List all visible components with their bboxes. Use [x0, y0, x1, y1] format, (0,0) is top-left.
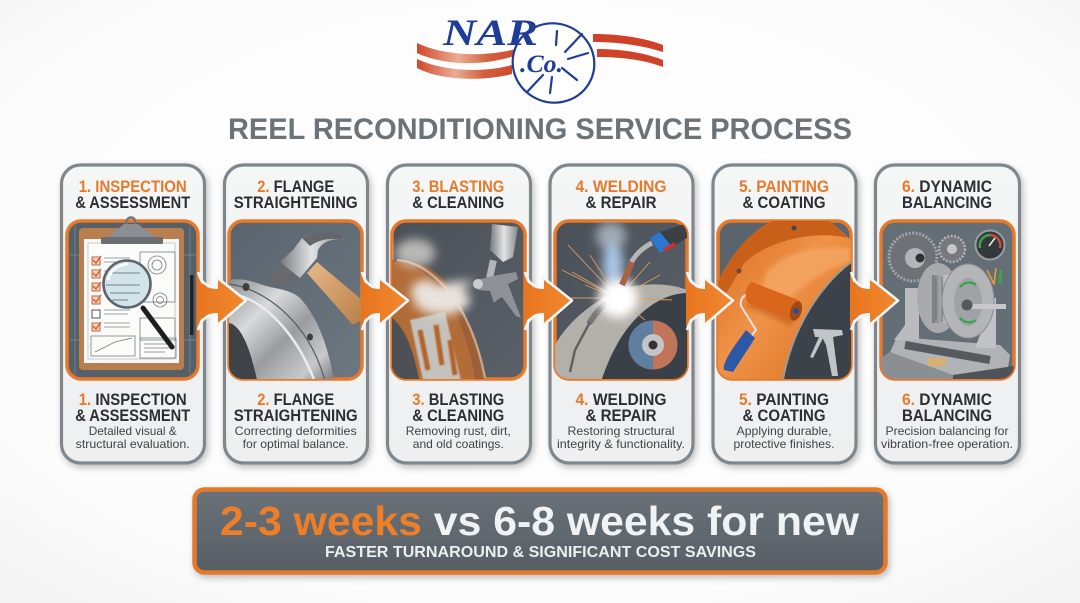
technical drawings: [91, 252, 176, 358]
step 3 description: Removing rust, dirt,: [406, 424, 511, 438]
clipboard clip: [101, 218, 163, 244]
panel: step 1 inspection card: structural evaluation.: [76, 437, 190, 451]
reel: [917, 263, 1006, 338]
title: REEL RECONDITIONING SERVICE PROCESS: [228, 113, 852, 146]
step 2 lower title: 2. FLANGE: [257, 391, 334, 409]
checklist: [92, 256, 130, 331]
step 1 description: Detailed visual &: [89, 424, 177, 438]
vibration gauge: [976, 230, 1004, 260]
pen: [190, 275, 194, 335]
arrow: step 2 to 3: [361, 272, 408, 330]
step 1 heading: 1. INSPECTION: [79, 178, 187, 196]
panel: step 3 blasting card: and old coatings.: [413, 437, 504, 451]
panel: step 2 flange card: for optimal balance.: [243, 437, 349, 451]
step 3 lower title: 3. BLASTING: [412, 391, 504, 409]
step 2 description: Correcting deformities: [235, 424, 357, 438]
step 1 subheading: & ASSESSMENT: [75, 194, 190, 212]
magnifying glass: [104, 260, 172, 347]
welding torch: [622, 222, 690, 285]
panel: step 5 painting card: & COATING: [742, 407, 826, 425]
step 4 illustration: welding torch and grinding disc: [555, 221, 690, 385]
panel: step 6 balancing card: BALANCING: [902, 407, 992, 425]
callout subline: FASTER TURNAROUND & SIGNIFICANT COST SAVINGS: [325, 544, 756, 561]
gears: [889, 233, 965, 281]
panel: step 4 welding card: integrity & functionality.: [557, 437, 685, 451]
panel: step 3 blasting card: [388, 165, 530, 463]
arrow: step 3 to 4: [524, 272, 572, 330]
step 4 description: Restoring structural: [568, 424, 674, 438]
panel: step 6 balancing card: [876, 165, 1020, 463]
arrow: step 5 to 6: [850, 272, 898, 330]
step 3 heading: 3. BLASTING: [412, 178, 504, 196]
spray gun: [810, 329, 843, 376]
panel: step 1 inspection card: & ASSESSMENT: [75, 407, 190, 425]
step 1 illustration: clipboard and magnifier: [67, 218, 198, 379]
step 2 heading: 2. FLANGE: [257, 178, 334, 196]
step 3 illustration: rusty flange and spray gun: [392, 221, 525, 385]
callout banner: [194, 490, 886, 572]
panel: step 6 balancing card: BALANCING: [902, 194, 992, 212]
step 6 illustration: balancing machine: [881, 221, 1014, 385]
panel: step 5 painting card: & COATING: [742, 194, 826, 212]
panel: step 2 flange card: [224, 165, 368, 463]
step 5 lower title: 5. PAINTING: [739, 391, 829, 409]
step 5 description: Applying durable,: [736, 424, 832, 438]
panel: step 4 welding card: & REPAIR: [586, 407, 657, 425]
step 2 illustration: hammer and flange: [229, 221, 362, 385]
logo: NAR Co: .Co.: [520, 51, 563, 78]
step 5 illustration: orange reel and paint roller: [718, 221, 851, 385]
machine base: [881, 338, 1014, 379]
step 1 lower title: 1. INSPECTION: [79, 391, 187, 409]
callout headline: 2-3 weeks vs 6-8 weeks for new: [220, 498, 859, 544]
smoke plume: [596, 222, 626, 287]
step 4 heading: 4. WELDING: [576, 178, 666, 196]
step 5 heading: 5. PAINTING: [739, 178, 829, 196]
step 6 description: Precision balancing for: [886, 424, 1008, 438]
panel: step 2 flange card: STRAIGHTENING: [234, 194, 358, 212]
grinding disc: [628, 320, 678, 370]
panel: step 2 flange card: STRAIGHTENING: [234, 407, 358, 425]
sparks: [562, 245, 672, 320]
paint roller: [724, 282, 804, 372]
step 6 lower title: 6. DYNAMIC: [902, 391, 992, 409]
vibration marks: [987, 268, 996, 285]
panel: step 6 balancing card: vibration-free operation.: [881, 437, 1013, 451]
panel: step 4 welding card: & REPAIR: [586, 194, 657, 212]
hammer handle: [307, 262, 362, 325]
logo: NAR Co: NAR: [442, 13, 538, 54]
dust cloud: [395, 239, 476, 315]
panel: step 5 painting card: [713, 165, 856, 463]
panel: step 3 blasting card: & CLEANING: [412, 194, 504, 212]
logo: NAR Co: [417, 12, 663, 114]
stands: [894, 288, 919, 340]
spray gun: [473, 224, 521, 318]
hammer head: [280, 232, 343, 288]
panel: step 5 painting card: protective finishes.: [734, 437, 834, 451]
panel: step 1 inspection card: [62, 165, 204, 463]
arrow: step 4 to 5: [686, 272, 733, 330]
arrow: step 1 to 2: [197, 272, 246, 330]
panel: step 4 welding card: [550, 165, 693, 463]
step 4 lower title: 4. WELDING: [576, 391, 666, 409]
panel: step 3 blasting card: & CLEANING: [412, 407, 504, 425]
step 6 heading: 6. DYNAMIC: [902, 178, 992, 196]
